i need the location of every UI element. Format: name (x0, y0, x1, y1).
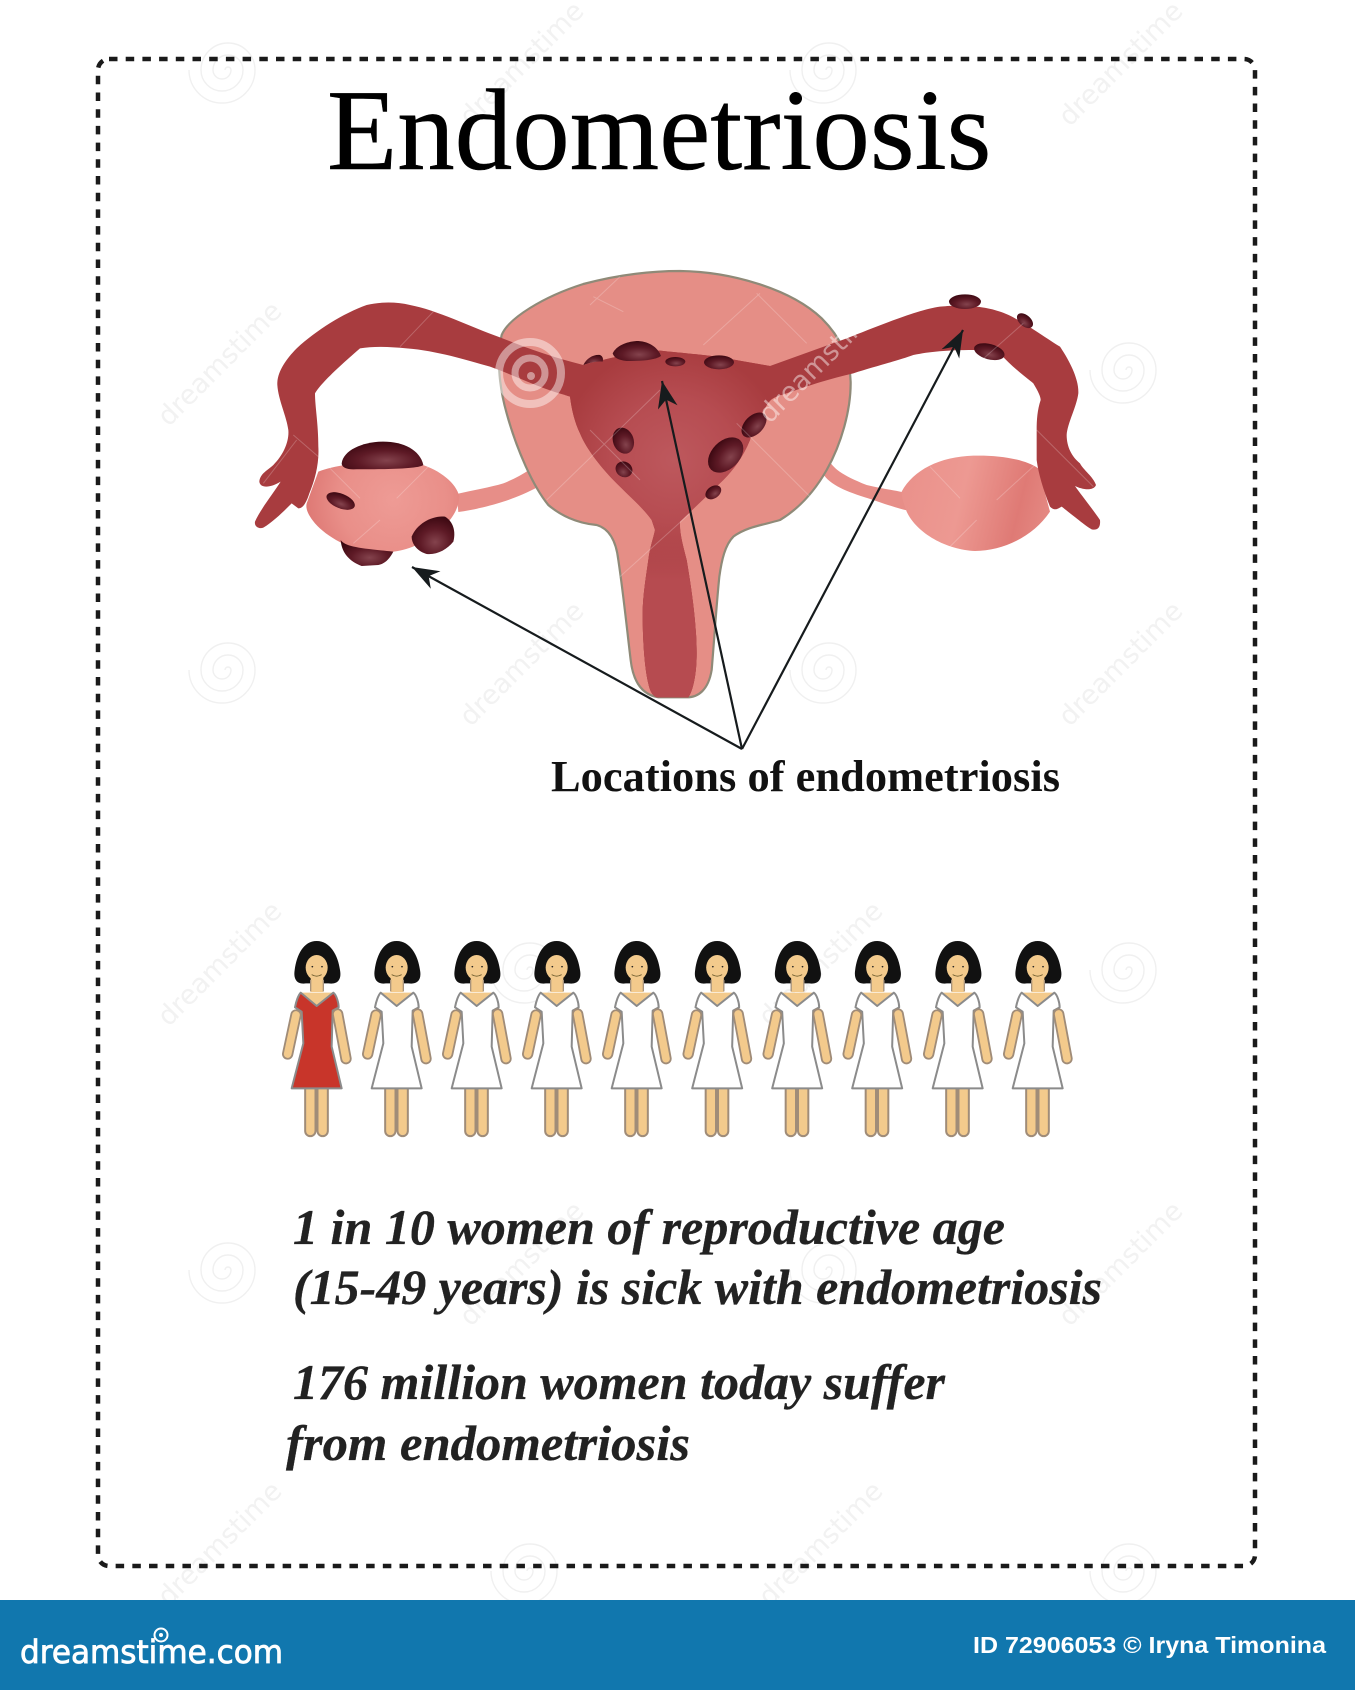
watermark: background spirals and wordmarks: dreamstime (454, 1196, 590, 1332)
cervical canal shading (643, 522, 697, 697)
watermark: background spirals and wordmarks: dreamstime (1053, 1196, 1189, 1332)
text block: prevalence: (15-49 years) is sick with endometriosis (293, 1260, 1102, 1315)
text block: global count (286, 1355, 946, 1471)
watermark: background spirals and wordmarks: dreamstime (454, 596, 590, 732)
lesions: left ovary (324, 442, 454, 566)
footer credit: ID 72906053 © Iryna Timonina (973, 1632, 1326, 1658)
watermark: white spiral and wordmark on uterus (499, 293, 889, 429)
ligament: right ovary (823, 459, 908, 511)
figure: woman 4 (528, 941, 586, 1131)
arrows: pointing to lesion locations (412, 330, 963, 749)
text block: prevalence (293, 1200, 1102, 1315)
ovary: right (902, 456, 1050, 551)
watermark: background spirals and wordmarks: dreamstime (1053, 596, 1189, 732)
uterus body (499, 271, 851, 697)
caption: locations of endometriosis: Locations of endometriosis (551, 751, 1060, 801)
watermark: background spirals and wordmarks: dreamstime (152, 896, 288, 1032)
watermark: white spiral and wordmark on uterus: dreamstime (753, 293, 889, 429)
panel: dashed border (98, 59, 1255, 1566)
text block: prevalence: 1 in 10 women of reproductive age (293, 1200, 1005, 1255)
text block: global count: 176 million women today suffer (293, 1355, 946, 1410)
fallopian tubes and uterine cavity (255, 302, 1100, 697)
pictogram: 1 in 10 women (288, 941, 1067, 1131)
figure: woman 5 (608, 941, 666, 1131)
figure: woman 8 (848, 941, 906, 1131)
text block: global count: from endometriosis (286, 1416, 690, 1471)
figure: affected woman in red (288, 941, 346, 1131)
figure: woman 3 (448, 941, 506, 1131)
watermark: background spirals and wordmarks: dreamstime (152, 296, 288, 432)
figure: woman 6 (688, 941, 746, 1131)
title: Endometriosis (327, 67, 991, 194)
figure: woman 7 (768, 941, 826, 1131)
watermark: background spirals and wordmarks: dreamstime (753, 896, 889, 1032)
ovary: left (306, 462, 459, 553)
watermark: background spirals and wordmarks (152, 0, 1189, 1612)
cavity shading (565, 351, 777, 697)
ligament: left ovary (457, 469, 538, 512)
figure: woman 2 (368, 941, 426, 1131)
lesions: uterus and right tube (583, 294, 1036, 502)
watermark: faint crossing lines (263, 277, 1093, 577)
footer logo: dreamstime.com (20, 1633, 283, 1671)
figure: woman 10 (1009, 941, 1067, 1131)
watermark: background spirals and wordmarks: dreamstime (152, 1476, 288, 1612)
footer bar (0, 1600, 1355, 1690)
watermark: background spirals and wordmarks: dreamstime (753, 1476, 889, 1612)
figure: woman 9 (929, 941, 987, 1131)
diagram: uterus with endometriosis lesions (255, 271, 1100, 697)
